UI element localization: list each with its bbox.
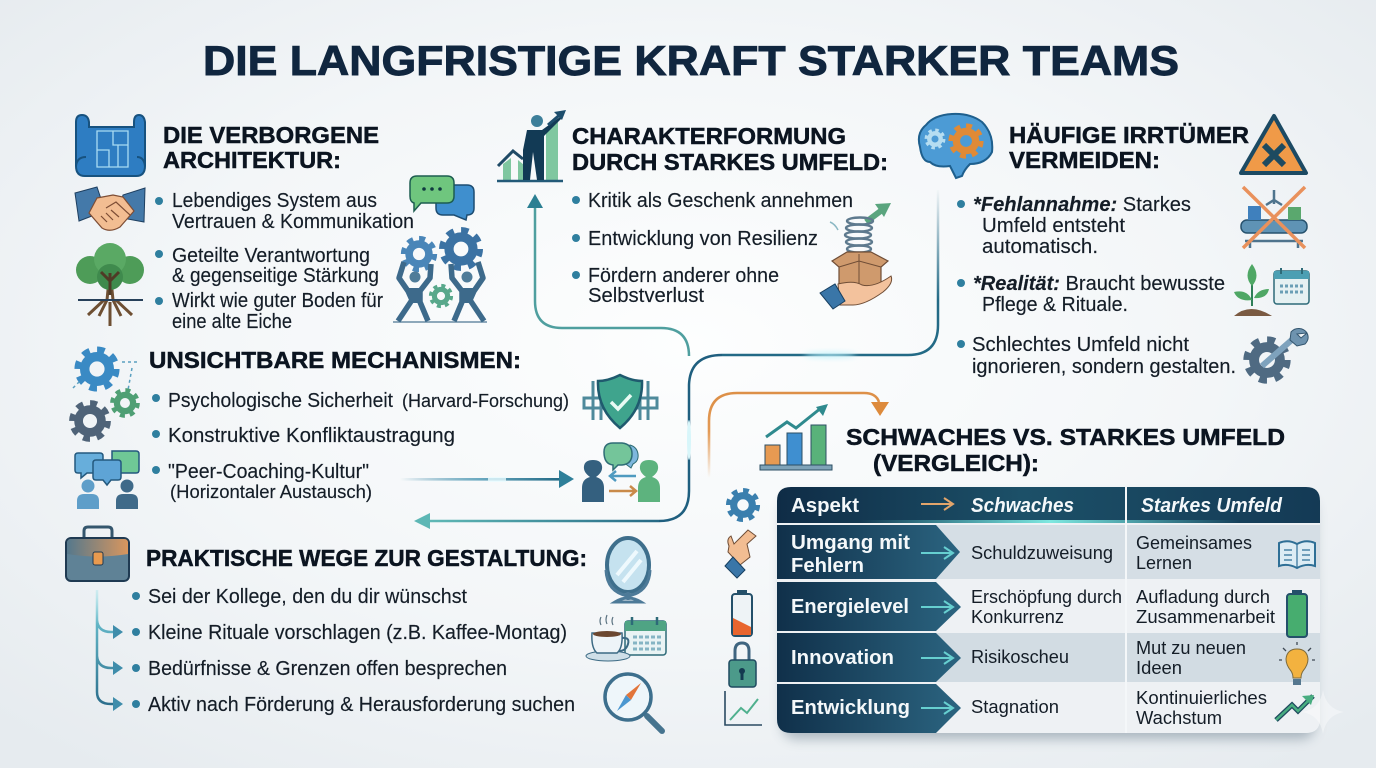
heading: CHARAKTERFORMUNG [572,123,846,149]
icon: shield with barrier [584,375,657,428]
icon: chat bubbles [410,176,474,220]
table header: Aspekt [791,495,859,517]
icon: person with growth chart [497,110,566,181]
bullet list: (Horizontaler Austausch) [170,482,372,502]
table rows: Risikoscheu [971,647,1069,667]
table header: Schwaches [971,495,1074,517]
icon: tree [76,243,144,326]
icon: bar chart [760,404,832,470]
bullet list [155,190,414,333]
icon: handshake [75,187,145,230]
icon: crossed conveyor [1241,187,1307,248]
bullet list: Psychologische Sicherheit [168,390,393,412]
arrow: connector up to Charakterformung [527,194,689,356]
icon: team holding gears [393,230,487,322]
icon: mirror [606,538,650,602]
bullet list: & gegenseitige Stärkung [172,265,379,287]
panel: Charakterformung [497,110,892,309]
sparkle [1302,690,1344,734]
heading: DIE VERBORGENE [163,122,379,148]
side icons [725,491,762,725]
comparison table [777,487,1320,739]
icon: chat people [75,451,139,509]
heading: DURCH STARKES UMFELD: [572,149,888,175]
table rows: Stagnation [971,697,1059,717]
table rows: Schuldzuweisung [971,543,1113,563]
bullet list: *Realität: Braucht bewusste [973,273,1225,295]
bullet list: ignorieren, sondern gestalten. [972,356,1236,378]
table rows: Entwicklung [791,697,910,719]
panel: Häufige Irrtümer [919,114,1309,380]
icon: coffee and calendar [586,615,666,661]
icon: full battery [1287,590,1307,637]
table rows: Fehlern [791,555,864,577]
bullet list: Kleine Rituale vorschlagen (z.B. Kaffee-Montag) [148,622,567,644]
icon: gear with wrench [1247,328,1308,380]
icon: compass magnifier [605,674,662,731]
table rows: Wachstum [1136,708,1222,728]
icon: briefcase [66,527,129,581]
table rows: Energielevel [791,596,909,618]
bullet list: (Harvard-Forschung) [402,391,569,411]
arrow: peer coaching [400,470,574,488]
heading: (VERGLEICH): [873,450,1039,476]
heading: SCHWACHES VS. STARKES UMFELD [846,424,1285,450]
table rows [777,487,1320,733]
heading [572,123,888,175]
bullet list: Kritik als Geschenk annehmen [588,190,853,212]
icon: light bulb [1279,642,1315,685]
bullet list: Bedürfnisse & Grenzen offen besprechen [148,658,507,680]
bullet list: Konstruktive Konfliktaustragung [168,425,455,447]
heading [846,424,1285,476]
connector tree [97,590,123,711]
table rows: Ideen [1136,658,1182,678]
icon: book [1279,541,1315,568]
heading [163,122,379,173]
bullet list [572,190,853,307]
table rows: Innovation [791,647,894,669]
bullet list: automatisch. [982,236,1098,258]
panel: Praktische Wege zur Gestaltung [66,527,666,731]
bullet list [132,586,575,716]
panel: Die verborgene Architektur [75,115,487,333]
heading: PRAKTISCHE WEGE ZUR GESTALTUNG: [146,545,587,571]
table rows: Lernen [1136,553,1192,573]
icon: brain with gear [919,114,992,178]
icon: growth arrow [1276,695,1314,720]
icon: blueprint [76,115,145,176]
table rows: Umgang mit [791,532,910,554]
bullet list: *Fehlannahme: Starkes [973,194,1191,216]
bullet list: Vertrauen & Kommunikation [172,211,414,233]
table rows: Konkurrenz [971,607,1064,627]
bullet list [957,194,1236,378]
bullet list: Pflege & Rituale. [982,294,1128,316]
table rows: Aufladung durch [1136,587,1270,607]
icon: gears cluster [72,350,139,439]
table header [777,487,1320,523]
arrow: connector from Irrtümer to Praktische Wege [414,190,938,529]
icon: warning triangle [1241,116,1306,173]
heading: HÄUFIGE IRRTÜMER [1009,122,1249,148]
arrow: connector to Vergleich [709,393,889,478]
bullet list: Schlechtes Umfeld nicht [972,334,1189,356]
bullet list: Aktiv nach Förderung & Herausforderung suchen [148,694,575,716]
icon: peer dialogue [582,443,660,502]
panel: Unsichtbare Mechanismen [72,347,660,509]
panel: Vergleich [725,404,1320,739]
bullet list: Wirkt wie guter Boden für [172,290,383,312]
table rows: Zusammenarbeit [1136,607,1275,627]
heading: UNSICHTBARE MECHANISMEN: [149,347,521,373]
bullet list: "Peer-Coaching-Kultur" [168,461,369,483]
bullet list: Sei der Kollege, den du dir wünschst [148,586,467,608]
heading [1009,122,1249,173]
table rows: Mut zu neuen [1136,638,1246,658]
icon: sprout and calendar [1234,264,1309,316]
table rows: Gemeinsames [1136,533,1252,553]
table header: Starkes Umfeld [1141,495,1283,517]
bullet list: Geteilte Verantwortung [172,245,370,267]
icon: spring box in hand [820,203,892,309]
table rows: Kontinuierliches [1136,688,1267,708]
bullet list: Umfeld entsteht [982,215,1125,237]
bullet list: eine alte Eiche [172,311,292,333]
bullet list: Fördern anderer ohne [588,265,779,287]
bullet list: Entwicklung von Resilienz [588,228,818,250]
heading: ARCHITEKTUR: [163,147,341,173]
title: DIE LANGFRISTIGE KRAFT STARKER TEAMS [203,37,1179,84]
bullet list: Selbstverlust [588,285,704,307]
bullet list: Lebendiges System aus [172,190,377,212]
table rows: Erschöpfung durch [971,587,1122,607]
heading: VERMEIDEN: [1009,147,1160,173]
bullet list [152,390,569,502]
